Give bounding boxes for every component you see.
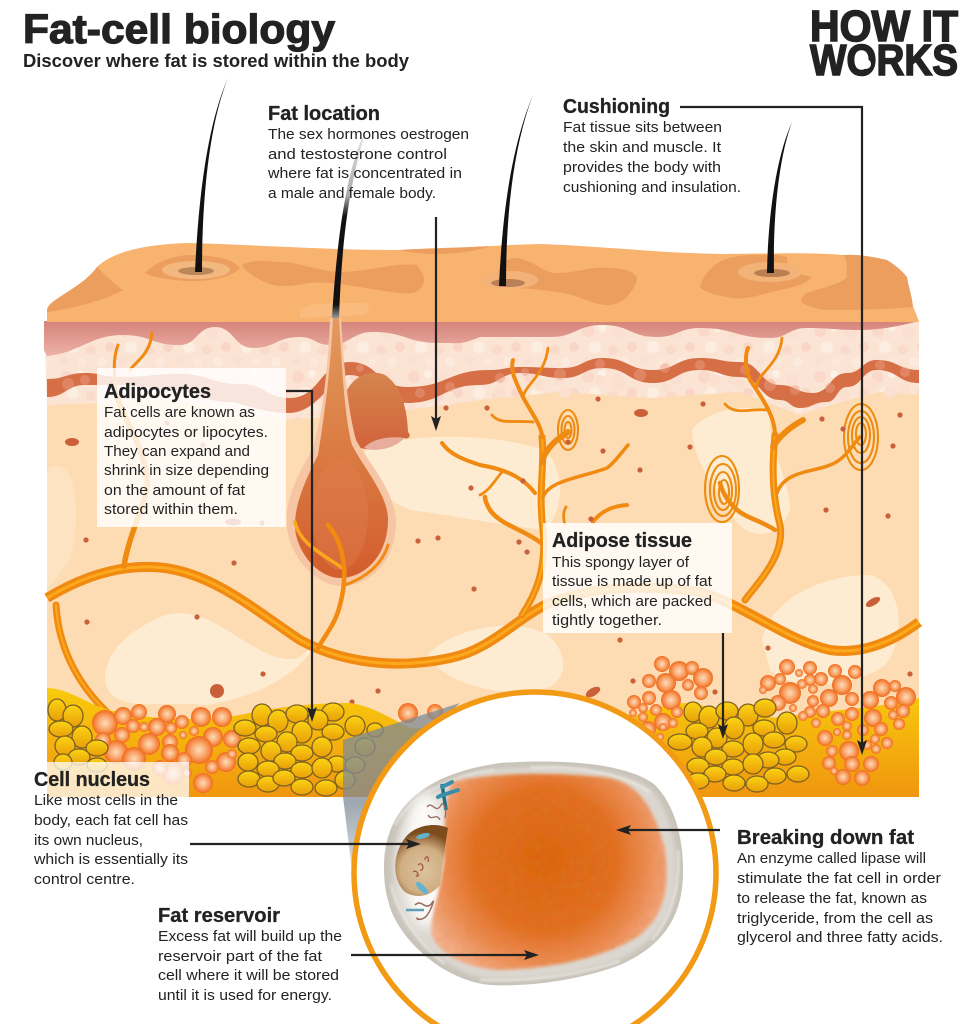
orange fat globules middle-right — [627, 656, 713, 741]
fat reservoir droplet — [432, 774, 667, 970]
text block: cushioning: Fat tissue sits between — [563, 120, 722, 136]
text block: cushioning: provides the body with — [563, 160, 721, 176]
text block: fat location: and testosterone control — [268, 147, 447, 163]
text block: adipocytes: Adipocytes — [104, 381, 211, 403]
nerve ending spirals — [558, 404, 878, 522]
zoom cone from tissue to magnified cell — [343, 703, 460, 870]
oil gland — [345, 373, 410, 450]
text block: adipocytes: They can expand and — [104, 444, 250, 460]
follicle nerves — [295, 522, 388, 648]
hair 1 — [195, 78, 228, 272]
text block: cushioning: Cushioning — [563, 96, 670, 118]
text block: cell nucleus: Like most cells in the — [34, 793, 178, 809]
nucleus — [395, 825, 448, 896]
text block: adipocytes: Fat cells are known as — [104, 405, 255, 421]
text block: adipocytes: shrink in size depending — [104, 463, 269, 479]
nerve tree 1 — [442, 348, 628, 615]
callout box: adipocytes — [97, 368, 286, 527]
text block: cushioning: the skin and muscle. It — [563, 140, 721, 156]
yellow subcutaneous fat layer — [47, 688, 919, 797]
text block: breaking down fat: triglyceride, from the cell as — [737, 911, 933, 927]
hair 4 — [767, 122, 792, 273]
callout box: adipose tissue — [543, 523, 732, 633]
hair 2 through follicle — [332, 130, 366, 318]
text block: breaking down fat: to release the fat, known as — [737, 891, 927, 907]
yellow fat cells centre cluster — [234, 703, 383, 796]
text block: adipose tissue: tightly together. — [552, 613, 662, 629]
follicle pores — [162, 261, 802, 318]
text block: fat reservoir: reservoir part of the fat — [158, 949, 322, 965]
text block: breaking down fat: stimulate the fat cell in order — [737, 871, 941, 887]
organelles — [406, 782, 458, 920]
text block: fat reservoir — [158, 905, 342, 1004]
text block: cushioning — [563, 96, 741, 196]
text block: adipose tissue: Adipose tissue — [552, 530, 692, 552]
text block: adipose tissue: This spongy layer of — [552, 555, 690, 571]
text block: cell nucleus: which is essentially its — [33, 852, 188, 868]
pink dermis layer — [44, 321, 919, 356]
text block: breaking down fat: An enzyme called lipase will — [737, 851, 926, 867]
fat cell — [384, 761, 683, 985]
text block: fat reservoir: cell where it will be stored — [158, 968, 339, 984]
logo: How It Works — [810, 2, 958, 85]
orange fat globules far right — [759, 659, 916, 786]
hair follicle bulb — [287, 318, 396, 586]
arrow: cell nucleus — [190, 839, 421, 849]
panel: skin cross-section illustration — [44, 78, 919, 797]
text block: fat reservoir: Excess fat will build up the — [158, 929, 342, 945]
bubbly fat layer — [44, 321, 919, 420]
membrane interior — [392, 767, 676, 979]
title: Fat-cell biology — [23, 6, 335, 52]
text block: adipocytes: on the amount of fat — [104, 483, 245, 499]
membrane highlights — [391, 767, 678, 980]
text block: breaking down fat: glycerol and three fatty acids. — [737, 930, 943, 946]
text block: cushioning: cushioning and insulation. — [563, 180, 741, 196]
dermis base layer — [47, 321, 919, 797]
text block: cell nucleus: body, each fat cell has — [34, 813, 188, 829]
text block: fat location: where fat is concentrated in — [267, 166, 462, 182]
text block: adipose tissue — [552, 530, 712, 629]
text block: cell nucleus: its own nucleus, — [34, 833, 143, 849]
text block: fat location: a male and female body. — [268, 186, 436, 202]
callout box: cell nucleus — [47, 762, 189, 798]
text block: fat reservoir: Fat reservoir — [158, 905, 280, 927]
text block: fat location — [267, 103, 469, 202]
text block: cell nucleus: Cell nucleus — [34, 769, 150, 791]
skin surface patches — [47, 246, 913, 312]
small dermis dots — [65, 396, 913, 736]
yellow fat cells right cluster — [668, 699, 809, 792]
arrow: fat location — [431, 217, 441, 431]
text block: fat location: Fat location — [268, 103, 380, 125]
dark dermal band — [47, 358, 919, 413]
text block: adipocytes: adipocytes or lipocytes. — [104, 425, 268, 441]
orange lens ring — [354, 692, 716, 1024]
arrow: cushioning — [680, 107, 867, 755]
text block: fat reservoir: until it is used for energy. — [158, 988, 332, 1004]
text block: breaking down fat: Breaking down fat — [737, 827, 914, 849]
epidermis top layer — [47, 243, 919, 322]
orange fat globules left — [92, 703, 443, 793]
bubbles below dermal band — [494, 374, 910, 401]
main nerve — [47, 333, 919, 715]
yellow fat cells left cluster — [48, 699, 108, 772]
arrow: fat reservoir — [351, 950, 539, 960]
text block: cell nucleus: control centre. — [34, 872, 135, 888]
arrow: breaking down fat — [616, 825, 720, 835]
nerve tree 2 — [720, 338, 860, 600]
panel: magnified fat cell circle — [354, 692, 716, 1024]
dermal band speckle — [62, 359, 910, 398]
text block: breaking down fat — [737, 827, 943, 946]
cytoplasm around nucleus — [403, 792, 447, 928]
text block: cell nucleus — [33, 769, 188, 888]
hair 3 — [499, 95, 533, 286]
cell membrane — [384, 761, 683, 985]
text block: adipose tissue: cells, which are packed — [552, 594, 712, 610]
arrow: adipocytes — [286, 391, 317, 722]
subtitle: Discover where fat is stored within the body — [23, 51, 409, 71]
text block: adipocytes — [104, 381, 269, 518]
text block: adipose tissue: tissue is made up of fat — [552, 574, 712, 590]
text block: adipocytes: stored within them. — [104, 502, 238, 518]
arrow: adipose tissue — [718, 633, 728, 739]
text block: fat location: The sex hormones oestrogen — [268, 127, 469, 143]
